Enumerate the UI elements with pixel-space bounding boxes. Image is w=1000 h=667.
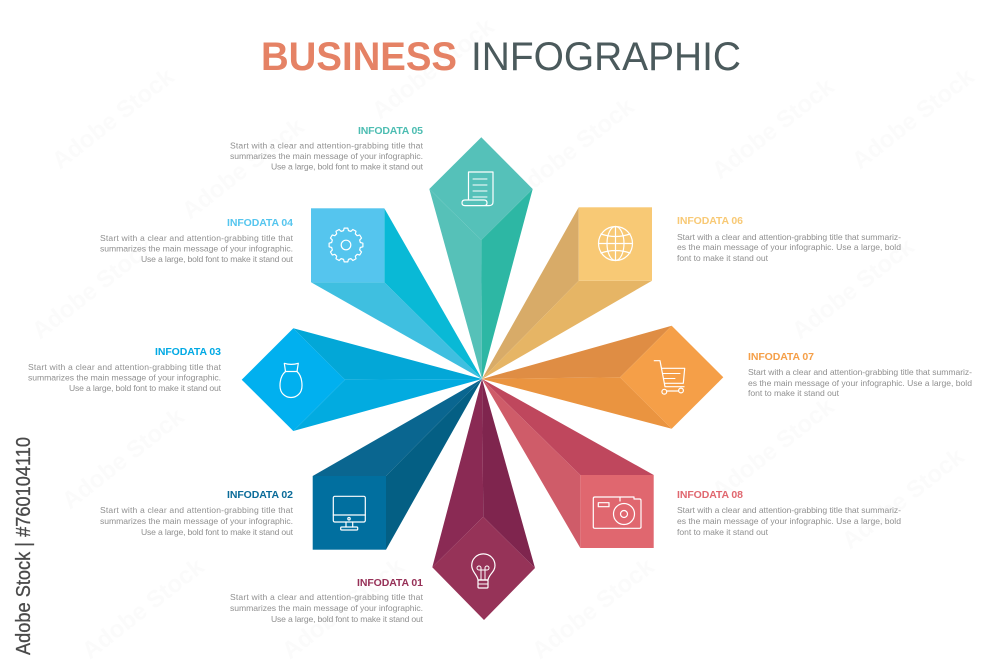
- text: Adobe Stock: [707, 393, 840, 505]
- text block 07: [748, 351, 972, 398]
- petal 07: orange diamond: [482, 326, 723, 429]
- text block 01: [230, 577, 424, 624]
- text block 03: Use a large, bold font to make it stand out: [69, 383, 222, 393]
- text block 06: Start with a clear and attention-grabbing title that summariz-: [677, 232, 901, 242]
- icon: monitor: [333, 496, 365, 530]
- text block 06: [677, 215, 901, 263]
- text block 08: INFODATA 08: [677, 489, 743, 501]
- text: Adobe Stock: [77, 553, 210, 665]
- text block 02: Start with a clear and attention-grabbing title that: [100, 505, 294, 515]
- text block 04: [100, 217, 294, 264]
- text: Adobe Stock: [27, 233, 160, 345]
- text: Adobe Stock: [367, 13, 500, 125]
- text block 05: Start with a clear and attention-grabbing title that: [230, 140, 424, 150]
- petal 08: coral square: [482, 379, 654, 548]
- text block 07: font to make it stand out: [748, 388, 840, 398]
- text block 02: INFODATA 02: [227, 489, 293, 501]
- text block 08: es the main message of your infographic. Use a large, bold: [677, 516, 901, 526]
- text block 05: [230, 125, 424, 172]
- text: Adobe Stock: [707, 73, 840, 185]
- text block 03: INFODATA 03: [155, 346, 221, 358]
- text block 06: INFODATA 06: [677, 215, 743, 227]
- text block 01: summarizes the main message of your infographic.: [230, 603, 423, 613]
- petal 05: teal diamond: [429, 137, 533, 379]
- icon: document scroll: [462, 172, 493, 206]
- icon: shopping cart: [654, 361, 685, 394]
- icon: light bulb: [472, 554, 495, 588]
- text: Adobe Stock: [787, 233, 920, 345]
- title: INFOGRAPHIC: [471, 35, 741, 79]
- icon: camera: [593, 497, 641, 528]
- petal 03: bright blue diamond: [242, 328, 482, 431]
- text block 01: INFODATA 01: [357, 577, 423, 589]
- text block 07: Start with a clear and attention-grabbing title that summariz-: [748, 367, 972, 377]
- text block 08: Start with a clear and attention-grabbing title that summariz-: [677, 505, 901, 515]
- text: Adobe Stock: [177, 113, 310, 225]
- text block 02: summarizes the main message of your infographic.: [100, 516, 293, 526]
- petal 06: yellow square: [482, 207, 652, 379]
- text block 06: es the main message of your infographic. Use a large, bold: [677, 242, 901, 252]
- icon: globe: [598, 226, 632, 260]
- stock credit: Adobe Stock | #760104110: [13, 437, 35, 655]
- text: Adobe Stock: [527, 553, 660, 665]
- text block 04: INFODATA 04: [227, 217, 293, 229]
- text block 05: summarizes the main message of your infographic.: [230, 151, 423, 161]
- text block 04: Use a large, bold font to make it stand out: [141, 254, 294, 264]
- text block 05: INFODATA 05: [358, 125, 423, 137]
- text block 01: Use a large, bold font to make it stand out: [271, 614, 424, 624]
- text block 03: [28, 346, 222, 393]
- text: Adobe Stock: [847, 63, 980, 175]
- text block 08: [677, 489, 901, 537]
- text: Adobe Stock: [57, 403, 190, 515]
- icon: gear: [329, 228, 363, 262]
- text block 04: Start with a clear and attention-grabbing title that: [100, 233, 294, 243]
- title: [261, 35, 741, 79]
- petal 04: light blue square: [311, 208, 482, 379]
- icon: money bag: [280, 363, 302, 398]
- text block 06: font to make it stand out: [677, 253, 769, 263]
- text block 04: summarizes the main message of your infographic.: [100, 244, 293, 254]
- text: Adobe Stock: [837, 443, 970, 555]
- text block 03: Start with a clear and attention-grabbing title that: [28, 362, 222, 372]
- text block 02: Use a large, bold font to make it stand out: [141, 527, 294, 537]
- text block 01: Start with a clear and attention-grabbing title that: [230, 592, 424, 602]
- text block 03: summarizes the main message of your infographic.: [28, 372, 221, 382]
- text: Adobe Stock: [47, 63, 180, 175]
- title: BUSINESS: [261, 35, 457, 79]
- text: Adobe Stock: [507, 93, 640, 205]
- text block 08: font to make it stand out: [677, 527, 769, 537]
- text block 07: es the main message of your infographic. Use a large, bold: [748, 378, 972, 388]
- text block 07: INFODATA 07: [748, 351, 814, 363]
- petal 01: maroon diamond: [432, 379, 535, 620]
- text block 05: Use a large, bold font to make it stand out: [271, 162, 424, 172]
- text block 02: [100, 489, 294, 537]
- text: Adobe Stock: [277, 553, 410, 665]
- petal 02: dark blue square: [313, 379, 482, 550]
